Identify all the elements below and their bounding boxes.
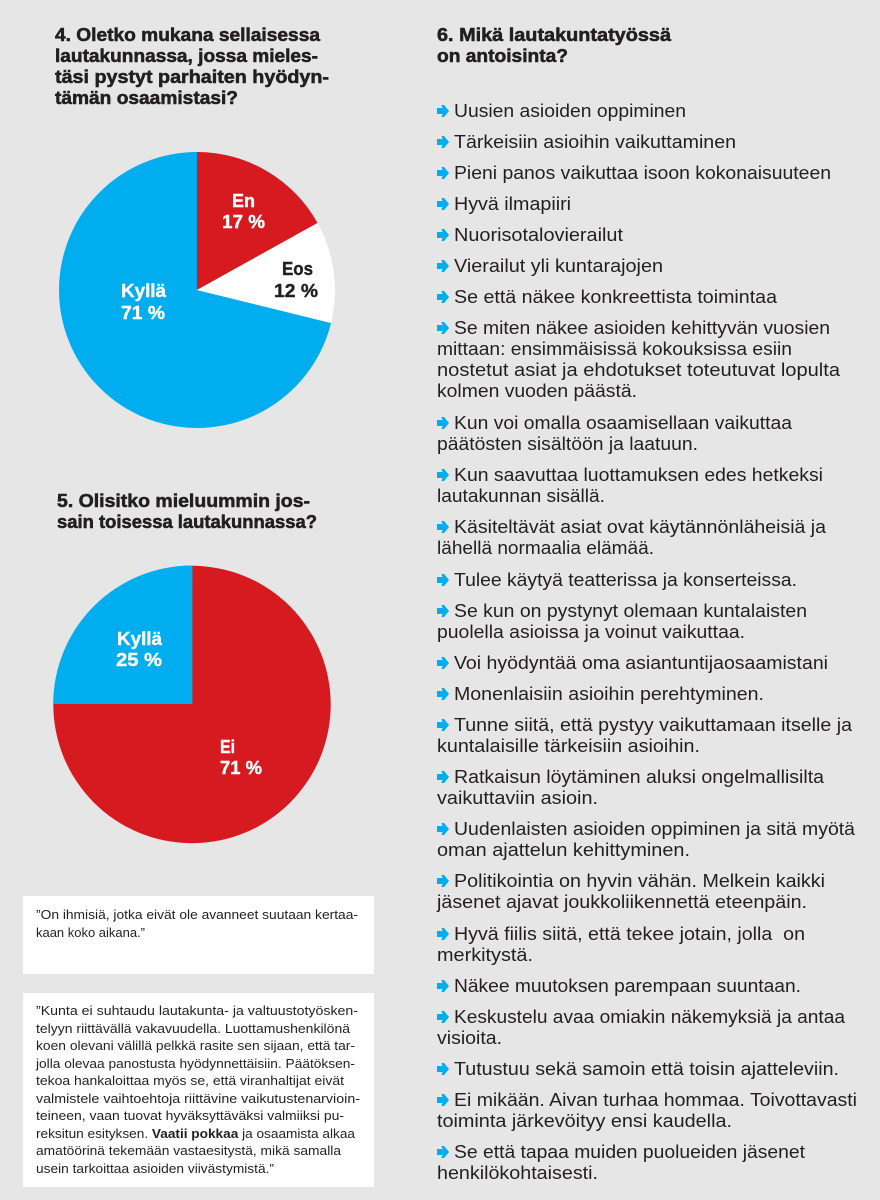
quote box: long quote: telyyn riittävällä vakavuudella. Luottamushenkilönä [36,1021,351,1036]
label: Kyllä 71 %: Kyllä [121,280,167,301]
quote box: long quote: koen olevani välillä pelkkä rasite sen sijaan, että tar- [36,1038,355,1053]
quote box: short quote [23,896,374,974]
list item: Tärkeisiin asioihin vaikuttaminen [454,132,736,152]
list item [437,601,807,642]
label: En 17 %: 17 % [222,211,265,232]
heading: question 4: 4. Oletko mukana sellaisessa [55,24,321,45]
list item: Käsiteltävät asiat ovat käytännönläheisiä ja [454,517,827,537]
list item: mittaan: ensimmäisissä kokouksissa esiin [437,339,792,359]
heading: question 6 [437,24,672,66]
slice: Eos 12 % [197,223,335,323]
label: Eos 12 %: 12 % [274,280,318,301]
list item: puolella asioissa ja voinut vaikuttaa. [437,622,745,642]
quote box: long quote: valmistele vaihtoehtoja riittävine vaikutustenarvioin- [36,1091,360,1106]
quote box: long quote: tekoa hankaloittaa myös se, että viranhaltijat eivät [36,1073,344,1088]
quote box: short quote: kaan koko aikana.” [36,925,145,940]
quote box: long quote: teineen, vaan tuovat hyväksyttäväksi valmiiksi pu- [36,1108,344,1123]
heading: question 4: lautakunnassa, jossa mieles- [55,45,318,66]
pie chart: question 5 [53,565,331,843]
list item: vaikuttaviin asioin. [437,788,598,808]
slice: En 17 % [197,152,318,290]
label: Kyllä 25 %: Kyllä [117,628,163,649]
list item: Vierailut yli kuntarajojen [454,256,663,276]
heading: question 4: täsi pystyt parhaiten hyödyn- [55,66,329,87]
label: Eos 12 %: Eos [282,258,313,279]
heading: question 4 [55,24,329,108]
label: Ei 71 %: 71 % [220,757,262,778]
list item: Se miten näkee asioiden kehittyvän vuosien [454,318,830,338]
list item [437,1090,857,1131]
list item: Kun voi omalla osaamisellaan vaikuttaa [454,413,793,433]
label: En 17 % [222,190,265,232]
slice: Kyllä 25 % [53,565,192,704]
label: Ei 71 % [220,736,262,778]
list item [437,318,841,401]
heading: question 5 [57,490,317,532]
list item: Tulee käytyä teatterissa ja konserteissa. [454,570,797,590]
list item: Kun saavuttaa luottamuksen edes hetkeksi [454,465,823,485]
heading: question 6: on antoisinta? [437,45,568,66]
heading: question 5: sain toisessa lautakunnassa? [57,511,317,532]
list item [437,924,805,965]
list item: Se kun on pystynyt olemaan kuntalaisten [454,601,807,621]
list item: Uudenlaisten asioiden oppiminen ja sitä myötä [454,819,856,839]
list item: Monenlaisiin asioihin perehtyminen. [454,684,764,704]
list item: Ratkaisun löytäminen aluksi ongelmallisilta [454,767,825,787]
list item: Se että näkee konkreettista toimintaa [454,287,778,307]
quote box: long quote: ”Kunta ei suhtaudu lautakunta- ja valtuustotyösken- [36,1003,358,1018]
quote box: long quote: amatöörinä tekemään vastaesitystä, mikä samalla [36,1143,342,1158]
quote box: long quote: reksitun esityksen. Vaatii pokkaa ja osaamista alkaa [36,1126,356,1141]
list item: nostetut asiat ja ehdotukset toteutuvat lopulta [437,360,841,380]
label: Ei 71 %: Ei [220,736,235,757]
quote box: short quote: ”On ihmisiä, jotka eivät ole avanneet suutaan kertaa- [36,907,358,922]
list item: Pieni panos vaikuttaa isoon kokonaisuuteen [454,163,831,183]
quote box: long quote: usein tarkoittaa asioiden viivästymistä.” [36,1161,274,1176]
pie chart: question 4 [59,152,335,428]
list item: oman ajattelun kehittyminen. [437,840,690,860]
list item [437,715,853,756]
list item: kuntalaisille tärkeisiin asioihin. [437,736,700,756]
list item: henkilökohtaisesti. [437,1163,598,1183]
list item [437,465,823,506]
heading: question 5: 5. Olisitko mieluummin jos- [57,490,310,511]
list item: Keskustelu avaa omiakin näkemyksiä ja antaa [454,1007,846,1027]
label: Kyllä 71 % [121,280,167,323]
list item: Uusien asioiden oppiminen [454,101,686,121]
list item: Tunne siitä, että pystyy vaikuttamaan itselle ja [454,715,853,735]
list item: Hyvä fiilis siitä, että tekee jotain, jolla on [454,924,805,944]
list item: Voi hyödyntää oma asiantuntijaosaamistani [454,653,828,673]
quote box: long quote: jolla olevaa panostusta hyödynnettäisiin. Päätöksen- [35,1056,355,1071]
list item [437,819,856,860]
list item: kolmen vuoden päästä. [437,381,637,401]
list item: lähellä normaalia elämää. [437,538,654,558]
slice: Kyllä 71 % [59,152,331,428]
list item: Tutustuu sekä samoin että toisin ajatteleviin. [454,1059,839,1079]
list item [436,871,825,912]
label: Kyllä 25 %: 25 % [116,649,162,670]
label: Kyllä 25 % [116,628,163,670]
list item [437,767,825,808]
list item: Nuorisotalovierailut [454,225,623,245]
list item [437,1007,846,1048]
list item: Se että tapaa muiden puolueiden jäsenet [454,1142,805,1162]
quote box: long quote [23,993,374,1187]
list item: Politikointia on hyvin vähän. Melkein kaikki [454,871,825,891]
list item [437,517,827,558]
list item: jäsenet ajavat joukkoliikennettä eteenpäin. [436,892,807,912]
list item: toiminta järkevöityy ensi kaudella. [437,1111,732,1131]
list item: päätösten sisältöön ja laatuun. [437,434,698,454]
list item [437,413,793,454]
list item: visioita. [437,1028,502,1048]
list item: Näkee muutoksen parempaan suuntaan. [454,976,801,996]
list item [437,1142,805,1183]
heading: question 6: 6. Mikä lautakuntatyössä [437,24,672,45]
label: En 17 %: En [232,190,255,211]
heading: question 4: tämän osaamistasi? [55,87,238,108]
list item: Ei mikään. Aivan turhaa hommaa. Toivottavasti [454,1090,857,1110]
list item: merkitystä. [437,945,533,965]
label: Kyllä 71 %: 71 % [121,302,165,323]
list: answers to question 6 [436,101,857,1183]
slice: Ei 71 % [53,566,331,843]
list item: Hyvä ilmapiiri [454,194,571,214]
list item: lautakunnan sisällä. [437,486,605,506]
label: Eos 12 % [274,258,318,301]
